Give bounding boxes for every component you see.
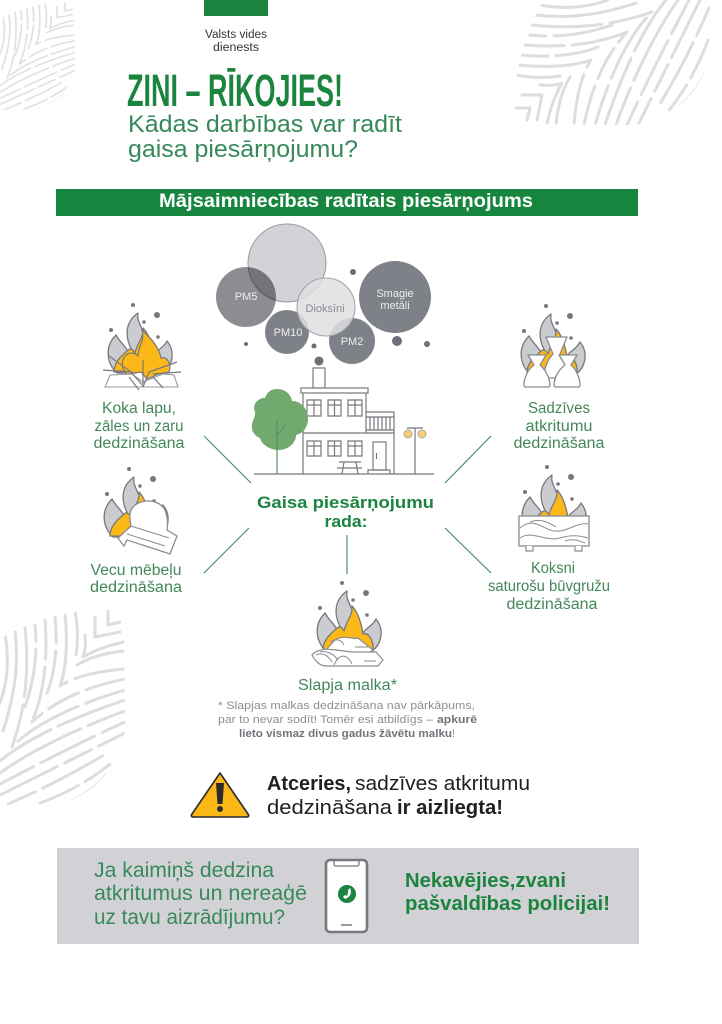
pollutant bubbles: PM5: [235, 291, 257, 303]
warning text: [267, 773, 530, 819]
pollutant bubbles: Dioksīni: [305, 303, 345, 315]
central heading: Gaisa piesārņojumu: [257, 493, 434, 512]
logo: green bar and agency name: Valsts vides: [205, 29, 267, 41]
connector lines: [204, 436, 491, 574]
title: ZINI – RĪKOJIES!: [127, 65, 343, 116]
icon: burning household waste bags: [521, 304, 585, 387]
question text: Ja kaimiņš dedzina: [94, 859, 274, 882]
question text: atkritumus un nereaģē: [94, 882, 307, 905]
central heading: [257, 493, 434, 531]
label: furniture: [90, 562, 182, 596]
icon: burning construction waste: [519, 465, 589, 551]
logo: green bar and agency name: [204, 0, 268, 54]
pollutant bubbles: metāli: [380, 300, 410, 312]
warning text: sadzīves atkritumu: [355, 773, 530, 795]
decorative fingerprint: bottom left: [0, 611, 125, 804]
subtitle: gaisa piesārņojumu?: [128, 136, 358, 163]
tree: [252, 389, 308, 474]
house illustration: [254, 368, 434, 474]
subtitle: Kādas darbības var radīt: [128, 111, 402, 138]
pollutant bubbles: PM10: [274, 327, 302, 339]
label: household waste: Sadzīves: [528, 400, 590, 417]
section banner: Mājsaimniecības radītais piesārņojums: [159, 191, 533, 212]
pollutant bubbles: PM2: [341, 336, 363, 348]
icon: warning triangle: [191, 773, 249, 817]
label: household waste: atkritumu: [526, 418, 592, 435]
label: household waste: [514, 400, 605, 452]
label: leaves: Koka lapu,: [102, 400, 176, 417]
footnote: * Slapjas malkas dedzināšana nav pārkāpums,: [218, 700, 475, 712]
icon: burning furniture: [104, 467, 177, 554]
pollutant bubbles: [216, 224, 431, 366]
label: construction waste: [488, 560, 610, 613]
label: construction waste: Koksni: [531, 560, 575, 577]
label: construction waste: saturošu būvgružu: [488, 578, 610, 595]
warning text: dedzināšana: [267, 797, 393, 819]
street lamp globes: [404, 430, 426, 438]
icon: phone: [326, 860, 367, 932]
footnote: !: [452, 728, 455, 740]
label: construction waste: dedzināšana: [506, 596, 598, 613]
logo: green bar and agency name: dienests: [213, 42, 259, 54]
call text: [405, 870, 610, 915]
warning text: Atceries,: [267, 773, 351, 795]
warning text: ir aizliegta!: [397, 797, 503, 819]
footnote: par to nevar sodīt! Tomēr esi atbildīgs –: [218, 714, 434, 726]
footnote: [218, 700, 477, 740]
question text: uz tavu aizrādījumu?: [94, 906, 285, 929]
pollutant bubbles: Smagie: [376, 288, 414, 300]
panel: call to action: [57, 848, 639, 944]
label: household waste: dedzināšana: [514, 435, 605, 452]
decorative fingerprint: top left: [0, 3, 75, 109]
subtitle: [128, 111, 402, 163]
question text: [94, 859, 307, 929]
label: wet wood: Slapja malka*: [298, 677, 397, 694]
footnote: apkurē: [437, 714, 477, 726]
label: leaves: zāles un zaru: [94, 418, 184, 435]
decorative fingerprint: top right: [516, 0, 709, 125]
call text: pašvaldības policijai!: [405, 893, 610, 915]
icon: burning leaves and branches: [103, 303, 181, 390]
section banner: [56, 189, 638, 216]
central heading: rada:: [324, 512, 368, 531]
icon: burning wet wood: [312, 581, 383, 666]
label: leaves: [94, 400, 185, 452]
footnote: lieto vismaz divus gadus žāvētu malku: [239, 728, 452, 740]
call text: Nekavējies,zvani: [405, 870, 566, 892]
label: leaves: dedzināšana: [94, 435, 185, 452]
label: furniture: Vecu mēbeļu: [90, 562, 182, 579]
label: furniture: dedzināšana: [90, 579, 182, 596]
